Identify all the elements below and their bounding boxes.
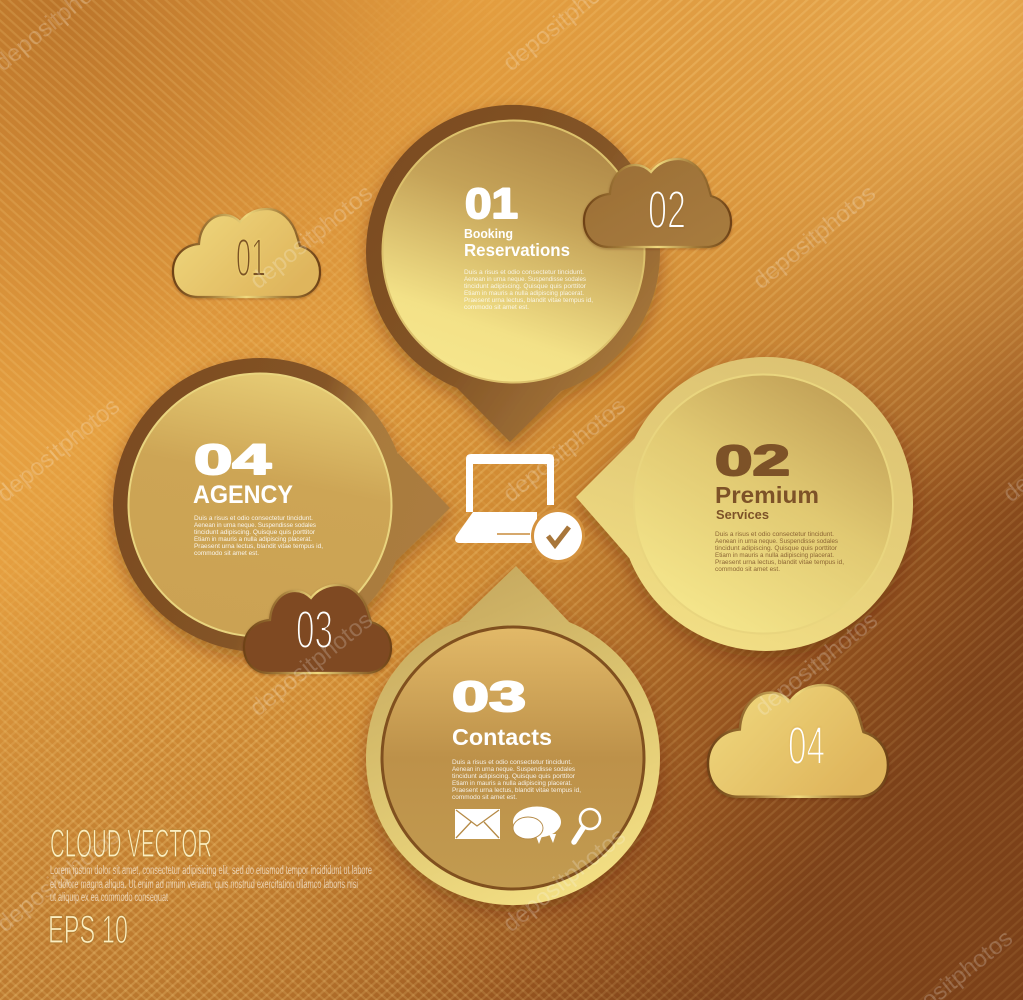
cloud: 01: 01 <box>236 228 266 288</box>
cloud number: 04: 04 <box>788 716 825 776</box>
disc: 03 <box>382 627 644 889</box>
cloud: 02 <box>584 159 731 247</box>
description text: Lorem ipsum dolor sit amet, consectetur adipisicing elit, sed do eiusmod tempor incididunt ut labore <box>50 865 372 877</box>
cloud number: 02: 02 <box>648 180 686 240</box>
icon: speech bubbles <box>513 806 561 844</box>
pin: 04 <box>113 358 450 652</box>
body text: 03: Duis a risus et odio consectetur tincidunt. <box>452 759 572 766</box>
description text: ut aliquip ex ea commodo consequat <box>50 892 168 904</box>
description text <box>50 865 372 904</box>
panel: 01 booking reservations <box>366 105 660 442</box>
body text: 03: Praesent urna lectus, blandit vitae tempus id, <box>452 787 581 794</box>
body text: 04: Etiam in mauris a nulla adipiscing placerat. <box>194 536 312 543</box>
body text: 03: Etiam in mauris a nulla adipiscing placerat. <box>452 780 572 787</box>
body text: 01 <box>464 269 593 311</box>
number: 03: 03 <box>452 673 526 721</box>
body text: 03 <box>452 759 581 801</box>
icon: envelope <box>455 809 500 839</box>
body text: 03: Aenean in urna neque. Suspendisse sodales <box>452 766 575 773</box>
body text: 04: Aenean in urna neque. Suspendisse sodales <box>194 522 316 529</box>
heading: contacts: Contacts <box>452 724 552 750</box>
number: 04: 04 <box>194 436 271 484</box>
body text: 02: Praesent urna lectus, blandit vitae tempus id, <box>715 559 844 566</box>
body text: 04 <box>194 515 323 557</box>
body text: 02 <box>715 531 844 573</box>
body text: 01: tincidunt adipiscing. Quisque quis porttitor <box>464 283 586 290</box>
body text: 01: Praesent urna lectus, blandit vitae tempus id, <box>464 297 593 304</box>
pin: 02 <box>576 357 913 651</box>
body text: 02: Duis a risus et odio consectetur tincidunt. <box>715 531 834 538</box>
body text: 02: tincidunt adipiscing. Quisque quis porttitor <box>715 545 837 552</box>
heading: booking: Booking <box>464 226 513 241</box>
title: cloud vector: CLOUD VECTOR <box>50 822 212 866</box>
body text: 01: commodo sit amet est. <box>464 304 529 311</box>
pin: 01 <box>366 105 660 442</box>
cloud: 01 <box>173 209 320 297</box>
body text: 01: Duis a risus et odio consectetur tincidunt. <box>464 269 584 276</box>
heading: agency: AGENCY <box>193 481 293 509</box>
number: 02: 02 <box>715 437 790 485</box>
panel: 04 agency <box>113 358 450 652</box>
body text: 01: Aenean in urna neque. Suspendisse sodales <box>464 276 586 283</box>
number: 01: 01 <box>465 180 518 228</box>
cloud: 03 <box>244 585 391 673</box>
body text: 04: commodo sit amet est. <box>194 550 259 557</box>
watermark: depositphotos <box>748 180 881 295</box>
panel: 02 premium services <box>576 357 913 651</box>
heading: reservations: Reservations <box>464 240 570 260</box>
body text: 02: commodo sit amet est. <box>715 566 780 573</box>
watermark: depositphotos <box>245 607 378 722</box>
description text: et dolore magna aliqua. Ut enim ad minim veniam, quis nostrud exercitation ullamco laboris nisi <box>50 879 358 891</box>
body text: 02: Aenean in urna neque. Suspendisse sodales <box>715 538 838 545</box>
body text: 04: Duis a risus et odio consectetur tincidunt. <box>194 515 313 522</box>
pin: 03 <box>366 566 660 905</box>
body text: 04: tincidunt adipiscing. Quisque quis porttitor <box>194 529 315 536</box>
watermark: depositphotos <box>498 823 631 938</box>
label: eps 10: EPS 10 <box>48 908 128 952</box>
watermark: depositphotos <box>750 607 883 722</box>
disc: 04 <box>128 374 392 636</box>
icon: laptop with check mark <box>455 454 585 563</box>
watermark: depositphotos <box>498 393 631 508</box>
watermark: depositphotos <box>245 180 378 295</box>
icon: magnifier <box>574 809 600 842</box>
body text: 04: Praesent urna lectus, blandit vitae tempus id, <box>194 543 323 550</box>
panel: 03 contacts <box>366 566 660 905</box>
body text: 03: commodo sit amet est. <box>452 794 517 801</box>
body text: 02: Etiam in mauris a nulla adipiscing placerat. <box>715 552 834 559</box>
disc: 02 <box>634 374 893 634</box>
heading: services: Services <box>716 507 769 522</box>
disc: 01 <box>382 120 644 382</box>
body text: 01: Etiam in mauris a nulla adipiscing placerat. <box>464 290 584 297</box>
cloud: 04 <box>708 685 888 797</box>
body text: 03: tincidunt adipiscing. Quisque quis porttitor <box>452 773 575 780</box>
heading: premium: Premium <box>715 482 819 508</box>
cloud number: 03: 03 <box>296 600 333 660</box>
